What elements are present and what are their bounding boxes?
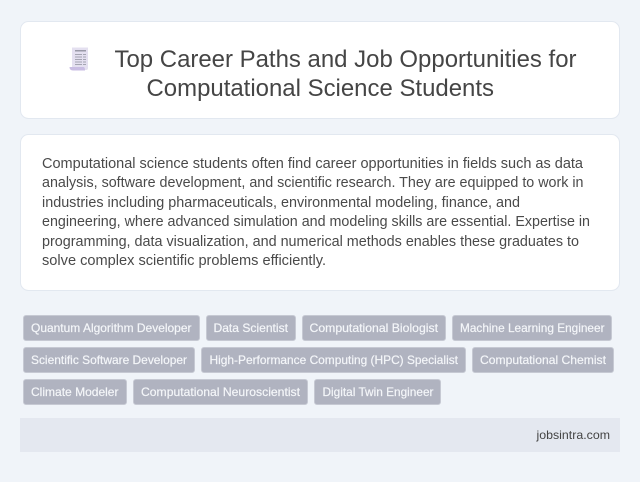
tag: High-Performance Computing (HPC) Specialist: High-Performance Computing (HPC) Specialist [210,353,459,367]
tag: Machine Learning Engineer: Machine Learning Engineer [460,321,605,335]
text block: description [42,156,590,269]
text block: description: industries including pharmaceuticals, environmental modeling, finance, and [42,195,520,211]
tag: Machine Learning Engineer [452,316,612,340]
tag: Computational Neuroscientist [134,380,308,404]
tag: Quantum Algorithm Developer: Quantum Algorithm Developer [31,321,192,335]
tag: Computational Chemist [472,348,614,372]
tag: Quantum Algorithm Developer [24,316,200,340]
tag: Digital Twin Engineer [314,380,440,404]
tag: Computational Biologist: Computational Biologist [310,321,439,335]
tag: Scientific Software Developer: Scientific Software Developer [31,353,187,367]
footer text: jobsintra.com [535,428,610,442]
title: Computational Science Students [146,75,494,102]
tag: Computational Chemist: Computational Chemist [480,353,607,367]
panel: description card [20,134,620,290]
title [114,46,576,102]
tag: Digital Twin Engineer: Digital Twin Engineer [322,385,434,399]
text block: description: Computational science students often find career opportunities in fields such as data [42,156,583,172]
tag: Climate Modeler: Climate Modeler [31,385,118,399]
icon: document scroll [70,48,88,70]
text block: description: analysis, software development, and scientific research. They are equipped to work in [42,175,584,191]
tag: Data Scientist [206,316,296,340]
tag: Computational Biologist [302,316,446,340]
tag: Scientific Software Developer [24,348,194,372]
panel: header card [20,22,620,118]
text block: description: solve complex scientific problems efficiently. [42,253,326,269]
tag: Climate Modeler [24,380,126,404]
text block: description: engineering, where advanced simulation and modeling skills are essential. Expertise in [42,214,590,230]
tag: Data Scientist: Data Scientist [214,321,289,335]
footer bar [20,418,620,452]
tag: High-Performance Computing (HPC) Specialist [202,348,466,372]
tag: Computational Neuroscientist: Computational Neuroscientist [141,385,301,399]
text block: description: programming, data visualization, and numerical methods enables these graduates to [42,234,579,250]
title: Top Career Paths and Job Opportunities for [114,46,576,73]
